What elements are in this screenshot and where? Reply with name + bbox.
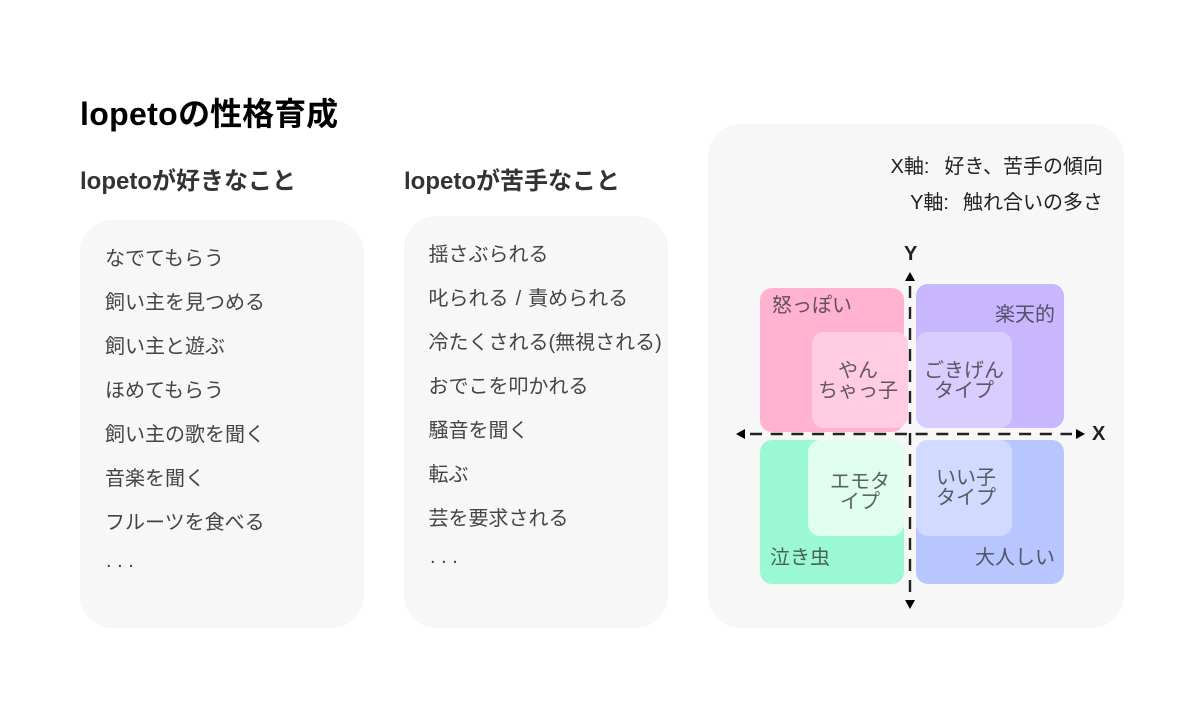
label: emo type: エモタ	[830, 471, 890, 493]
label: Y axis: Y	[904, 243, 917, 265]
likes item 1: なでてもらう	[105, 248, 224, 270]
panel: dislikes	[404, 216, 668, 628]
likes item 4: ほめてもらう	[105, 380, 224, 402]
inner box: naughty	[812, 332, 908, 428]
heading: dislikes: lopetoが苦手なこと	[404, 168, 620, 195]
label: good child type	[936, 467, 996, 509]
title: lopetoの性格育成	[80, 96, 338, 132]
quadrant: quiet	[916, 440, 1064, 584]
likes item 7: フルーツを食べる	[105, 512, 265, 534]
horizontal axis	[736, 429, 1085, 439]
label: quiet: 大人しい	[975, 547, 1055, 569]
label: X axis: X	[1092, 423, 1105, 445]
label: cheerful type: タイプ	[934, 380, 994, 402]
vertical axis	[905, 272, 915, 609]
likes ellipsis: . . .	[106, 550, 134, 572]
dislikes item 2: 叱られる / 責められる	[428, 288, 628, 310]
likes item 2: 飼い主を見つめる	[105, 292, 265, 314]
panel: likes	[80, 220, 364, 628]
inner box: emo	[808, 440, 904, 536]
label: naughty type: やん	[838, 360, 878, 382]
label: cheerful type: ごきげん	[924, 360, 1004, 382]
label: naughty type: ちゃっ子	[818, 380, 898, 402]
quadrant: optimistic	[916, 284, 1064, 428]
label: emo type	[830, 471, 890, 513]
dislikes ellipsis: . . .	[430, 546, 458, 568]
axis legend: Y: Y軸: 触れ合いの多さ	[910, 192, 1103, 214]
label: optimistic: 楽天的	[995, 304, 1055, 326]
axis legend: X: X軸: 好き、苦手の傾向	[890, 156, 1103, 178]
label: crybaby: 泣き虫	[770, 547, 830, 569]
label: good child type: タイプ	[936, 487, 996, 509]
likes item 6: 音楽を聞く	[105, 468, 205, 490]
likes item 3: 飼い主と遊ぶ	[105, 336, 225, 358]
dislikes item 5: 騒音を聞く	[428, 420, 528, 442]
label: good child type: いい子	[936, 467, 996, 489]
label: emo type: イプ	[840, 491, 880, 513]
dislikes item 3: 冷たくされる(無視される)	[428, 332, 662, 354]
inner box: good child	[916, 440, 1012, 536]
label: cheerful type	[924, 360, 1004, 402]
axes with arrows	[736, 272, 1085, 609]
dislikes item 1: 揺さぶられる	[428, 244, 548, 266]
label: naughty type	[818, 360, 898, 402]
inner box: cheerful	[916, 332, 1012, 428]
label: angry: 怒っぽい	[772, 295, 852, 317]
dislikes item 7: 芸を要求される	[428, 508, 568, 530]
dislikes item 6: 転ぶ	[428, 464, 468, 486]
panel: personality matrix	[708, 124, 1124, 628]
heading: likes: lopetoが好きなこと	[80, 168, 296, 195]
likes item 5: 飼い主の歌を聞く	[105, 424, 265, 446]
dislikes item 4: おでこを叩かれる	[428, 376, 588, 398]
quadrant: crybaby	[760, 440, 904, 584]
quadrant: angry	[760, 288, 904, 432]
